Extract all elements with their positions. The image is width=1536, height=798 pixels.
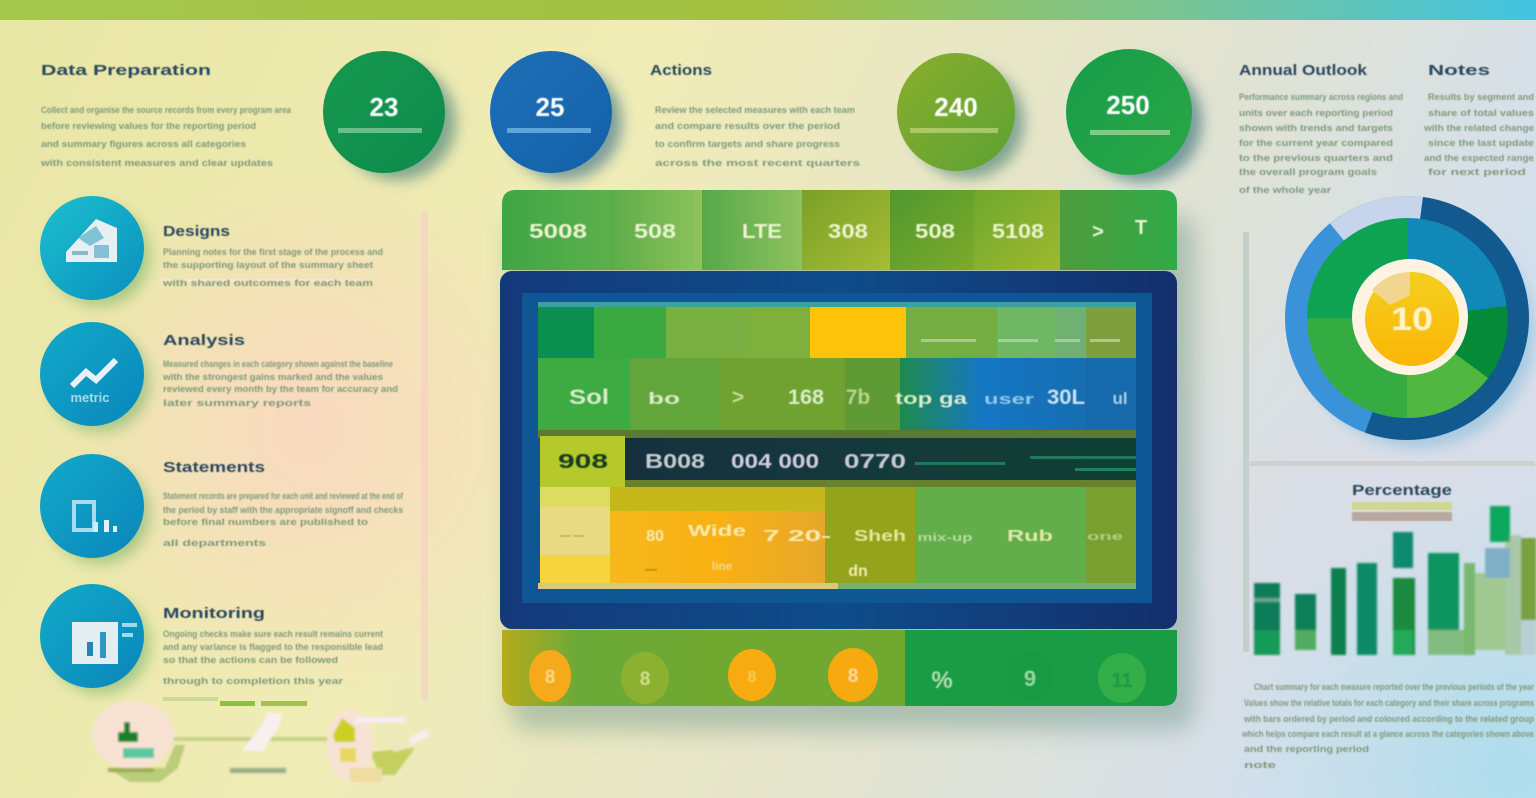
right text column two: Results by segment and: [1428, 92, 1534, 103]
list item 4: and any variance is flagged to the responsible lead: [163, 642, 383, 653]
table row 2: Sol: [569, 386, 609, 409]
icon: seal 1: %: [931, 667, 953, 694]
top segment strip: >: [1092, 221, 1104, 243]
icon: coin 2: 8: [640, 669, 650, 690]
list item 3: Statement records are prepared for each unit and reviewed at the end of: [163, 491, 404, 502]
bar chart heading: Percentage: [1352, 482, 1452, 499]
table row 4: 7 20-: [763, 528, 831, 545]
table row 3: 004 000: [731, 451, 819, 473]
icon: seal 3: 11: [1111, 670, 1133, 692]
donut chart: [1285, 196, 1534, 448]
vertical rule right: [1243, 232, 1249, 652]
top segment strip: 5008: [529, 221, 587, 243]
right text column one: [1239, 62, 1403, 196]
list item 1: Planning notes for the first stage of the process and: [163, 247, 383, 258]
list item 4: through to completion this year: [163, 676, 343, 687]
right text column one: to the previous quarters and: [1239, 153, 1393, 164]
bottom right text block: and the reporting period: [1244, 744, 1369, 755]
table row 2: 7b: [846, 386, 870, 409]
list item 1: Designs: [163, 223, 230, 240]
table row 2: >: [732, 386, 744, 409]
table row 3: B008: [645, 451, 705, 473]
icon: trend line: [40, 322, 144, 426]
icon: seal 2: [1008, 652, 1052, 700]
intro text block left: before reviewing values for the reporting period: [41, 121, 256, 132]
table row 4: [538, 487, 1136, 589]
intro text block centre: [650, 62, 860, 169]
list item 3: all departments: [163, 538, 266, 549]
right text column one: Performance summary across regions and: [1239, 92, 1403, 103]
list item 2: reviewed every month by the team for accuracy and: [163, 384, 398, 395]
table row 4: mix-up: [918, 532, 973, 544]
stat circle 250: 250: [1106, 90, 1150, 120]
list item 2: later summary reports: [163, 398, 311, 409]
right text column one: the overall program goals: [1239, 167, 1377, 178]
table row 4: Rub: [1007, 528, 1053, 545]
icon: coin 4: 8: [848, 666, 858, 687]
list item 2: [40, 322, 398, 432]
stat circle 23: [323, 51, 456, 180]
stat circle 240: 240: [934, 92, 978, 122]
top segment strip: LTE: [742, 221, 782, 243]
intro text block centre: to confirm targets and share progress: [655, 139, 840, 150]
list item 4: Monitoring: [163, 605, 265, 622]
list item 4: so that the actions can be followed: [163, 655, 338, 666]
intro text block left: [40, 62, 292, 169]
table row 2: bo: [648, 389, 680, 408]
top segment strip: [502, 190, 1177, 270]
icon: report page: [40, 584, 144, 688]
top segment strip: 5108: [992, 221, 1044, 243]
intro text block left: Data Preparation: [41, 62, 211, 79]
list item 1: the supporting layout of the summary sheet: [163, 260, 374, 271]
icon: seal 2: 9: [1024, 666, 1036, 691]
top segment strip: 508: [634, 221, 676, 243]
list item 3: before final numbers are published to: [163, 517, 368, 528]
left list panel with vertical rule: [160, 212, 428, 700]
top segment strip: T: [1135, 217, 1147, 239]
table row 4: one: [1087, 531, 1123, 543]
list item 1: [40, 196, 383, 306]
right text column two: share of total values: [1428, 108, 1534, 119]
table row 2: ul: [1112, 389, 1128, 408]
table row 4: Sheh: [854, 528, 906, 545]
icon: house document: [40, 196, 144, 300]
table row 1: [538, 307, 1136, 358]
table row 4: Wide: [688, 523, 746, 540]
table row 2: user: [984, 391, 1034, 408]
table row 4: —: [645, 562, 657, 576]
list item 2: Measured changes in each category shown against the baseline: [163, 359, 393, 370]
intro text block centre: Actions: [650, 62, 712, 79]
right text column two: Notes: [1428, 62, 1490, 79]
bottom segment strip: [502, 630, 1177, 706]
list item 4: Ongoing checks make sure each result remains current: [163, 629, 384, 640]
top segment strip: 308: [828, 221, 868, 243]
table row 4: — —: [559, 530, 585, 542]
stat circle 250: [1066, 49, 1202, 182]
icon: coin 1: 8: [545, 667, 555, 688]
table row 4: 80: [646, 528, 664, 545]
main table panel: [500, 271, 1177, 629]
list item 2: Analysis: [163, 332, 245, 349]
intro text block centre: Review the selected measures with each team: [655, 105, 855, 116]
bar chart heading: [1352, 482, 1452, 521]
intro text block centre: across the most recent quarters: [655, 158, 860, 169]
centre panel shadow: [510, 215, 1195, 730]
list item 2: with the strongest gains marked and the values: [162, 372, 383, 383]
table row 2: 168: [788, 386, 824, 409]
right text column two: [1423, 62, 1534, 178]
right text column one: of the whole year: [1239, 185, 1331, 196]
table row 4: dn: [848, 563, 868, 580]
list item 4: [40, 584, 384, 694]
right text column two: with the related change: [1423, 123, 1534, 134]
top segment strip: 508: [915, 221, 955, 243]
top gradient bar: [0, 0, 1536, 20]
icon: coin 3: [728, 649, 776, 701]
table row 3: 908: [558, 451, 608, 473]
right text column one: units over each reporting period: [1239, 108, 1393, 119]
right text column two: for next period: [1428, 167, 1526, 178]
right text column one: for the current year compared: [1239, 138, 1393, 149]
icon: coin 2: [621, 652, 669, 704]
table row 2: [538, 358, 1136, 430]
right text column two: and the expected range: [1424, 153, 1534, 164]
icon: seal 3: [1098, 653, 1146, 703]
bottom left pictograms: [92, 701, 428, 782]
footnote tabs: [163, 697, 307, 706]
icon: document chart: [40, 454, 144, 558]
list item 3: the period by staff with the appropriate signoff and checks: [163, 505, 403, 516]
donut chart: 10: [1391, 301, 1433, 337]
horizontal rule right: [1250, 461, 1535, 466]
table row 2: 30L: [1047, 386, 1085, 409]
stat circle 25: [490, 51, 622, 180]
table row 3: [538, 430, 1136, 487]
right text column one: shown with trends and targets: [1239, 123, 1393, 134]
list item 1: with shared outcomes for each team: [162, 278, 373, 289]
stat circle 25: 25: [536, 92, 564, 122]
list item 3: [40, 454, 404, 564]
table row 3: 0770: [844, 451, 906, 473]
icon: coin 4: [828, 648, 878, 702]
bar chart: [1254, 506, 1536, 655]
right text column two: since the last update: [1428, 138, 1534, 149]
icon: coin 3: 8: [748, 669, 757, 686]
list item 3: Statements: [163, 459, 265, 476]
intro text block left: and summary figures across all categories: [41, 139, 246, 150]
stat circle 23: 23: [370, 92, 398, 122]
intro text block left: Collect and organise the source records from every program area: [41, 105, 292, 116]
bottom right text block: note: [1244, 760, 1276, 771]
icon: coin 1: [529, 650, 571, 702]
intro text block left: with consistent measures and clear updates: [40, 158, 273, 169]
bottom right text block: [1241, 682, 1534, 771]
table row 4: line: [712, 559, 733, 573]
intro text block centre: and compare results over the period: [655, 121, 840, 132]
table row 2: top ga: [895, 389, 968, 408]
right text column one: Annual Outlook: [1239, 62, 1368, 79]
stat circle 240: [897, 53, 1024, 178]
icon: trend line: metric: [70, 390, 110, 405]
